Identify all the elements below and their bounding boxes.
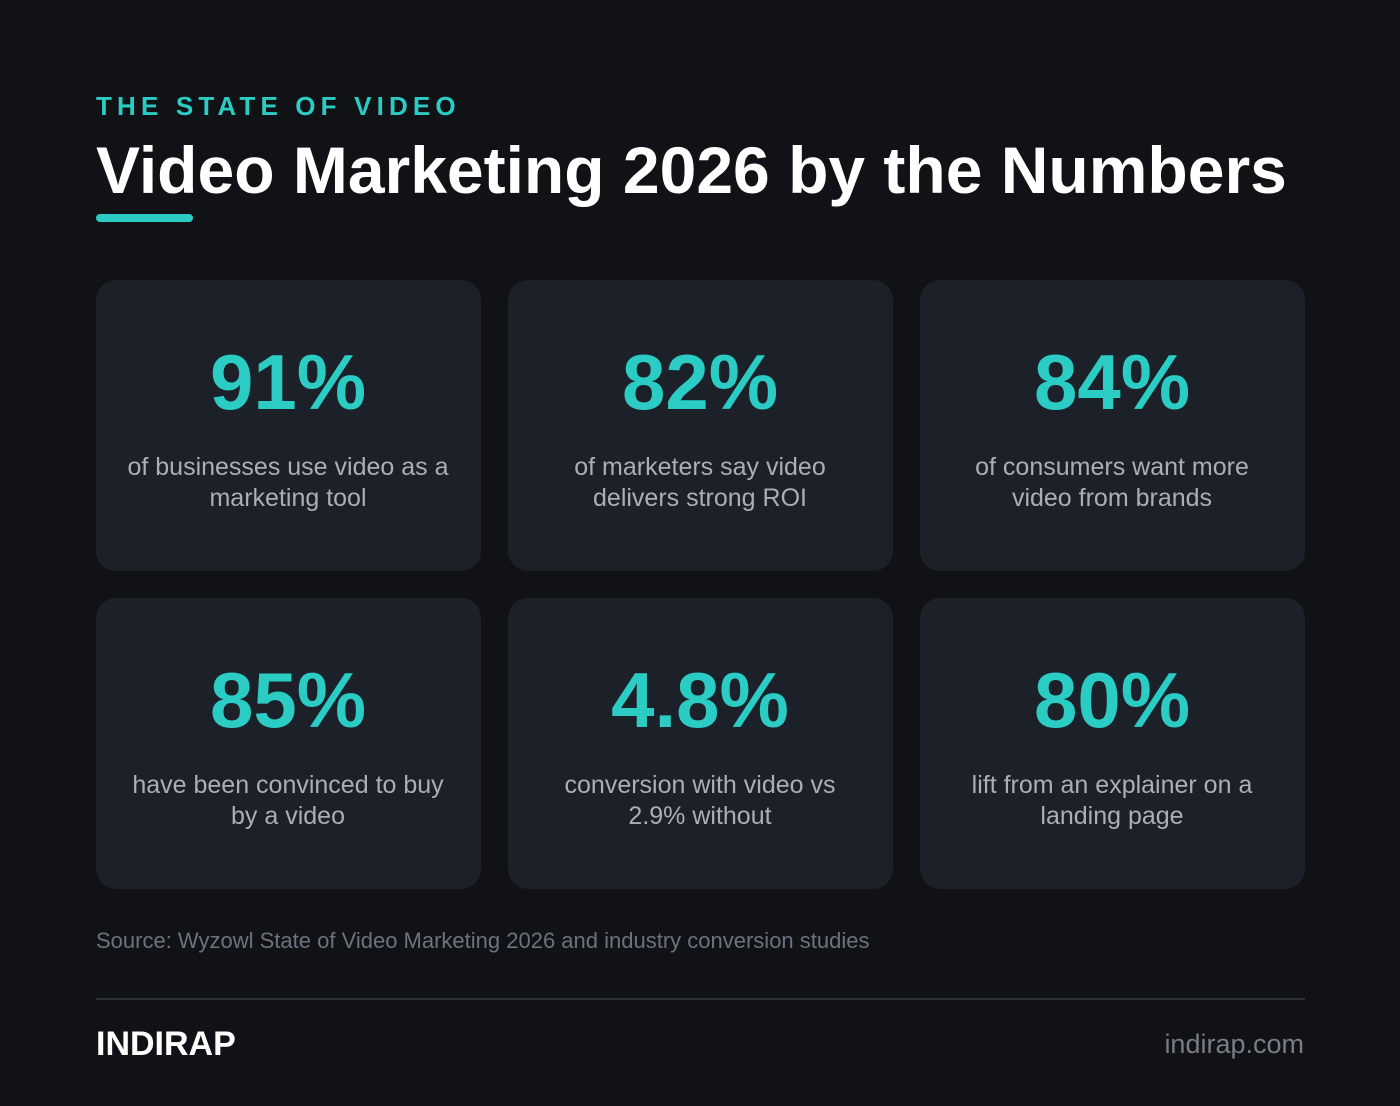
panel: 82% stat card (508, 280, 893, 571)
description: marketers (574, 453, 826, 512)
description: convinced: have been convinced to buy (132, 771, 444, 799)
website: indirap.com (1164, 1029, 1304, 1059)
panel: 4.8% stat card (508, 598, 893, 889)
panel: 80% stat card (920, 598, 1305, 889)
description: marketers: of marketers say video (574, 453, 826, 481)
description: marketers: delivers strong ROI (593, 484, 807, 512)
description: convinced: by a video (231, 802, 345, 830)
title accent underline (96, 214, 193, 222)
panel: 85% stat card (96, 598, 481, 889)
stat: 80%: 80% (1034, 656, 1190, 744)
description: conversion: 2.9% without (628, 802, 772, 830)
panel: 84% stat card (920, 280, 1305, 571)
description: convinced (132, 771, 444, 830)
description: businesses: of businesses use video as a (127, 453, 449, 481)
source note: Source: Wyzowl State of Video Marketing 2026 and industry conversion studies (96, 928, 869, 953)
description: explainer lift: lift from an explainer on a (972, 771, 1252, 799)
stat: 84%: 84% (1034, 338, 1190, 426)
title: Video Marketing 2026 by the Numbers (96, 133, 1287, 207)
description: businesses: marketing tool (209, 484, 367, 512)
stat: 85%: 85% (210, 656, 366, 744)
stat: 91%: 91% (210, 338, 366, 426)
description: conversion: conversion with video vs (565, 771, 835, 799)
panel: 91% stat card (96, 280, 481, 571)
brand name: INDIRAP (96, 1025, 236, 1063)
description: consumers: video from brands (1012, 484, 1212, 512)
description: businesses (127, 453, 449, 512)
description: conversion (565, 771, 835, 830)
description: consumers (975, 453, 1249, 512)
stat: 4.8%: 4.8% (611, 656, 789, 744)
description: explainer lift: landing page (1040, 802, 1184, 830)
description: explainer lift (972, 771, 1252, 830)
eyebrow heading: THE STATE OF VIDEO (96, 91, 461, 121)
description: consumers: of consumers want more (975, 453, 1249, 481)
stat: 82%: 82% (622, 338, 778, 426)
